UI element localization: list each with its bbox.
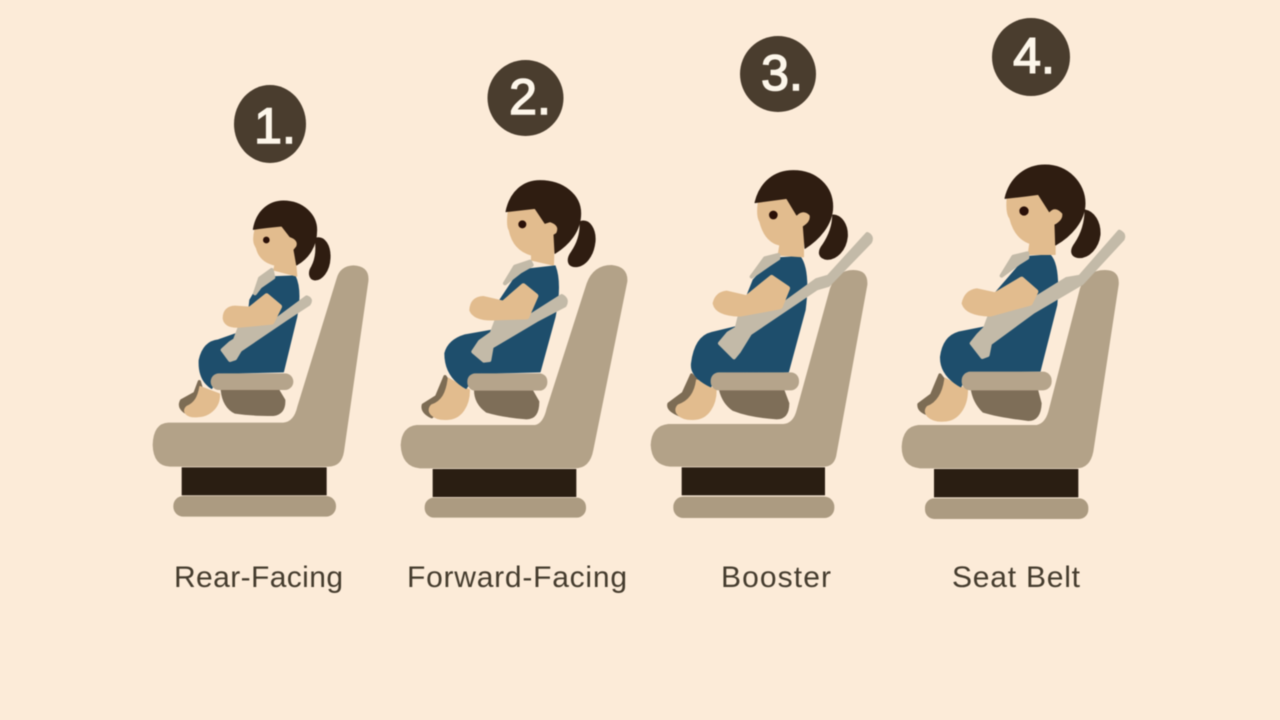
stage 1: rear-facing child in seat bbox=[153, 201, 368, 517]
seat 1 rail bbox=[173, 496, 336, 517]
child 4 eye bbox=[1019, 206, 1029, 216]
number badge 1: 1. bbox=[254, 98, 296, 154]
number badge 4 bbox=[992, 18, 1070, 96]
child 2 head bbox=[508, 200, 554, 265]
seat 1 bbox=[153, 265, 368, 467]
child 1 eye bbox=[263, 237, 270, 243]
stage 2: forward-facing child in seat bbox=[401, 181, 627, 518]
child 4 head bbox=[1007, 185, 1055, 254]
child 3 foot bbox=[676, 380, 716, 419]
seat 4 base bbox=[934, 469, 1078, 497]
child 2 arm bbox=[472, 286, 536, 318]
child 2 ear bbox=[547, 221, 559, 233]
number badge 2: 2. bbox=[509, 69, 551, 125]
child 3 seat belt bbox=[720, 234, 871, 357]
booster 3 underside bbox=[720, 390, 788, 418]
seat 3 bbox=[651, 270, 867, 467]
child 3 arm bbox=[715, 278, 787, 314]
child 1 hair bbox=[253, 201, 317, 265]
number badge 4: 4. bbox=[1013, 28, 1055, 84]
label: rear-facing: Rear-Facing bbox=[174, 561, 343, 594]
booster 3 cushion bbox=[711, 372, 799, 390]
child 4 seat belt bbox=[972, 232, 1123, 357]
child 2 lap belt bbox=[473, 296, 566, 361]
booster 2 cushion bbox=[467, 373, 547, 391]
seat 3 rail bbox=[673, 497, 834, 518]
child 2 far shoe bbox=[423, 377, 449, 417]
child 4 arm bbox=[964, 279, 1036, 314]
stage 3: booster child in seat bbox=[651, 171, 871, 518]
child 3 far shoe bbox=[669, 375, 697, 415]
child 1 lap belt bbox=[223, 297, 310, 360]
number badge 3: 3. bbox=[761, 45, 803, 101]
booster 4 cushion bbox=[962, 372, 1052, 390]
label: seat belt: Seat Belt bbox=[952, 561, 1081, 594]
child 3 ponytail bbox=[819, 215, 847, 259]
child 2 ponytail bbox=[568, 221, 595, 267]
child 1 ear bbox=[288, 237, 299, 248]
stage 4: seat belt child in seat bbox=[902, 165, 1123, 519]
label: booster: Booster bbox=[721, 561, 831, 594]
child 4 dress bbox=[941, 255, 1057, 387]
seat 2 bbox=[401, 265, 627, 468]
child 4 hair bbox=[1005, 165, 1085, 245]
child 2 foot bbox=[429, 378, 469, 419]
number badge 1 bbox=[234, 85, 306, 163]
child 2 shoulder belt bbox=[505, 262, 532, 283]
child 1 arm bbox=[225, 296, 279, 325]
child 1 ponytail bbox=[309, 238, 330, 280]
booster 2 underside bbox=[475, 390, 538, 418]
child 4 foot bbox=[926, 378, 967, 421]
booster 1 cushion bbox=[211, 373, 293, 390]
seat 2 rail bbox=[425, 498, 586, 518]
seat 4 bbox=[902, 270, 1119, 468]
seat 2 base bbox=[433, 469, 576, 497]
child 3 shoulder belt bbox=[752, 255, 778, 277]
booster 1 underside bbox=[222, 390, 284, 415]
child 3 ear bbox=[799, 212, 811, 224]
number badge 3 bbox=[740, 36, 816, 112]
child 2 hair bbox=[506, 181, 581, 253]
label: forward-facing: Forward-Facing bbox=[407, 561, 627, 594]
child 1 far shoe bbox=[181, 382, 202, 412]
child 3 hair bbox=[755, 171, 833, 248]
child 1 head bbox=[254, 220, 297, 276]
child 1 shoulder belt bbox=[255, 270, 273, 293]
child 1 dress bbox=[199, 276, 299, 388]
child 2 eye bbox=[518, 220, 526, 228]
child 4 ear bbox=[1049, 209, 1063, 223]
seat 4 rail bbox=[925, 498, 1088, 519]
child 1 foot bbox=[185, 387, 219, 417]
child 2 dress bbox=[445, 266, 558, 388]
number badge 2 bbox=[488, 60, 564, 136]
seat 1 base bbox=[182, 467, 327, 495]
child 4 shoulder belt bbox=[1002, 253, 1027, 276]
booster 4 underside bbox=[972, 388, 1041, 420]
seat 3 base bbox=[682, 467, 825, 495]
child 3 dress bbox=[692, 257, 807, 387]
child 4 ponytail bbox=[1072, 210, 1100, 258]
child 3 eye bbox=[769, 211, 778, 219]
child 4 far shoe bbox=[919, 375, 945, 415]
child 3 head bbox=[758, 190, 803, 257]
